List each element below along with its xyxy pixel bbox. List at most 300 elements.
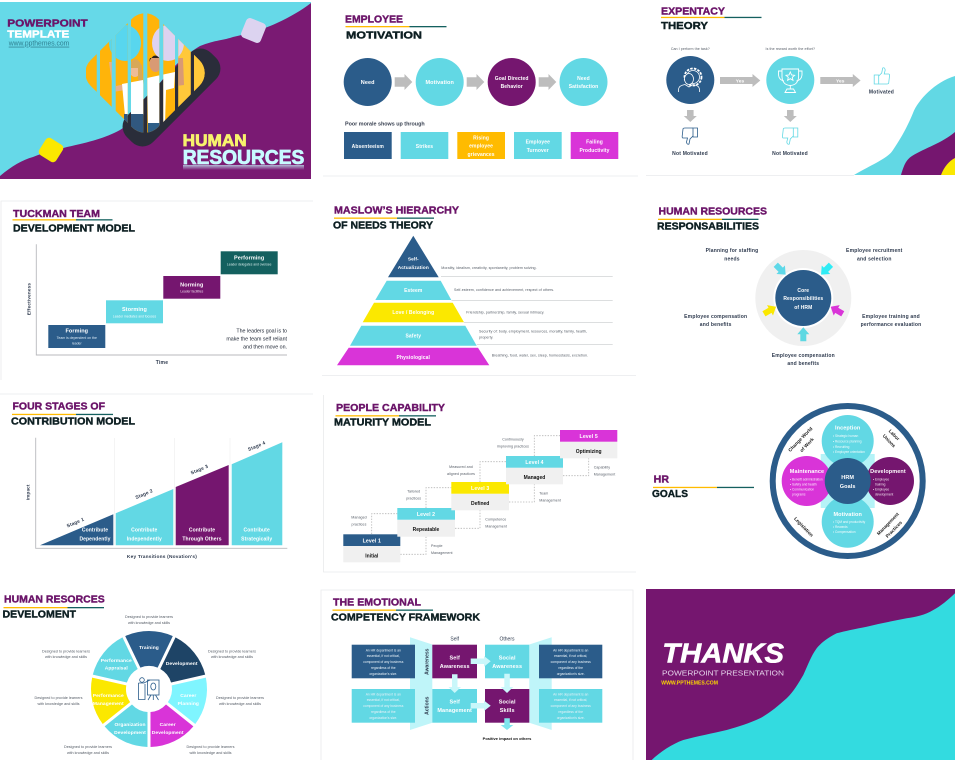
management labels: Team — [539, 492, 548, 496]
row labels: Awareness — [424, 648, 430, 675]
management labels: People — [431, 544, 443, 548]
practice labels: practices — [406, 497, 421, 501]
not motivated labels: Not Motivated — [672, 151, 708, 157]
side description boxes: essential, if not critical, — [367, 654, 400, 658]
heading — [661, 6, 762, 32]
level 3 — [451, 482, 509, 510]
side description boxes: regardless of the — [371, 666, 396, 670]
side description boxes: regardless of the — [371, 710, 396, 714]
stage labels — [66, 440, 267, 529]
stage: norming — [163, 276, 220, 299]
goal: development: Development — [870, 469, 906, 475]
caption: Poor morale shows up through — [345, 122, 425, 128]
stage: forming — [48, 325, 105, 348]
down arrows — [684, 110, 797, 122]
heading: EMPLOYEE — [345, 14, 403, 26]
core circle diagram: Core — [797, 288, 809, 294]
side description boxes: essential, if not critical, — [554, 654, 587, 658]
heading — [657, 205, 767, 232]
matrix boxes: Skills — [500, 708, 515, 714]
management labels: Capability — [594, 466, 610, 470]
heading: THEORY — [661, 20, 708, 32]
icon: trophy in circle — [766, 56, 814, 104]
ring labels: of Work — [799, 437, 816, 454]
stage captions: Independently — [127, 536, 162, 542]
panel: emotional competency framework — [321, 590, 633, 760]
leader goal note: and then move on. — [243, 344, 287, 350]
heading — [652, 474, 754, 500]
side description boxes: regardless of the — [558, 666, 583, 670]
heading: TUCKMAN TEAM — [13, 208, 100, 220]
responsibility labels: and selection — [857, 256, 892, 262]
symptom boxes: Rising — [473, 136, 489, 142]
level 2: Level 2 — [417, 512, 435, 518]
cover heading: TEMPLATE — [7, 28, 69, 40]
wheel descriptions: Designed to provide learners — [187, 745, 235, 749]
yes arrows — [720, 74, 861, 87]
stage captions: Contribute — [82, 528, 108, 534]
management labels — [431, 466, 615, 555]
column labels: Self — [450, 636, 460, 642]
goal: motivation: • Compensation — [833, 530, 856, 534]
side description boxes: organization's size. — [369, 716, 397, 720]
wheel descriptions: with knowledge and skills — [189, 751, 232, 755]
outcome label: Positive impact on others — [483, 736, 532, 741]
side description boxes: essential, if not critical, — [367, 698, 400, 702]
heading: DEVELOPMENT MODEL — [13, 222, 136, 234]
stage captions: Through Others — [182, 536, 222, 542]
goal: maintenance: • Safety and health — [790, 482, 817, 486]
heading: MOTIVATION — [346, 29, 422, 41]
side description boxes: component of any business — [551, 704, 591, 708]
photo: two people with speech bubbles — [86, 13, 205, 133]
leader goal note: The leaders goal is to — [236, 328, 287, 334]
level 4: Level 4 — [525, 460, 544, 466]
stage captions: Dependently — [79, 536, 111, 542]
management labels: Management — [539, 498, 561, 502]
pyramid: Esteem — [404, 288, 423, 294]
level 1: Level 1 — [363, 538, 381, 544]
matrix boxes — [432, 645, 529, 723]
wheel descriptions: Designed to provide learners — [42, 650, 90, 654]
panel: employee motivation — [323, 14, 638, 176]
level 1 — [343, 534, 400, 562]
dotted connectors — [372, 436, 589, 554]
heading: MATURITY MODEL — [334, 417, 432, 429]
center: hrm goals: Goals — [840, 484, 856, 490]
row labels: Actions — [424, 696, 430, 715]
ring labels: Practices — [885, 520, 904, 540]
process flow circles: Motivation — [425, 80, 454, 86]
decoration: lavender rounded square — [240, 17, 267, 44]
pyramid: Safety — [405, 334, 421, 340]
panel: people capability maturity model — [324, 395, 636, 572]
leader goal note — [226, 328, 288, 350]
management labels: Management — [431, 551, 453, 555]
goal: motivation: • TQM and productivity — [833, 520, 866, 524]
stage labels: Stage 3 — [190, 464, 209, 476]
responsibility labels: Employee compensation — [772, 353, 835, 359]
questions: Is the reward worth the effort? — [766, 47, 815, 51]
goal: maintenance: programs — [792, 492, 806, 496]
y axis label: Effectiveness — [26, 283, 32, 315]
practice labels: Measured and — [449, 465, 473, 469]
goal: maintenance: • Communication — [790, 488, 814, 492]
wheel descriptions: Designed to provide learners — [64, 745, 112, 749]
purple wave — [0, 3, 311, 179]
heading: HUMAN RESORCES — [4, 594, 105, 606]
matrix boxes: Awareness — [440, 664, 470, 670]
ring labels — [787, 426, 904, 540]
level 1: Initial — [365, 554, 379, 560]
ring labels: Labor — [887, 428, 901, 442]
practice labels: Managed — [351, 516, 367, 520]
axes — [36, 438, 287, 548]
process flow circles — [344, 58, 608, 106]
process flow circles: Need — [361, 80, 375, 86]
practice labels: aligned practices — [447, 472, 475, 476]
responsibility labels: Employee recruitment — [846, 248, 903, 254]
management labels: Management — [485, 524, 507, 528]
wheel labels: Development — [152, 730, 184, 736]
practice labels: Continuously — [502, 438, 524, 442]
wheel descriptions: Designed to provide learners — [208, 650, 256, 654]
panel: human resources responsibilities — [657, 205, 921, 367]
process flow circles: Need — [577, 76, 590, 82]
heading: FOUR STAGES OF — [12, 401, 106, 413]
center: hrm goals — [825, 458, 871, 504]
flow arrows — [395, 74, 556, 90]
side description boxes: essential, if not critical, — [554, 698, 587, 702]
cyan wave — [652, 593, 955, 760]
side description boxes: organization's size. — [369, 672, 397, 676]
ring labels: Unions — [881, 433, 897, 449]
side description boxes: An HR department is an — [553, 692, 588, 696]
wheel descriptions: Designed to provide learners — [35, 696, 83, 700]
practice labels: practices — [352, 522, 367, 526]
wheel labels: Appraisal — [105, 666, 128, 672]
stage captions: Contribute — [189, 528, 215, 534]
goal: development: • Employee — [873, 478, 889, 482]
inward arrows — [761, 261, 846, 341]
stage captions: Contribute — [244, 528, 270, 534]
goal: development: • Employee — [873, 488, 889, 492]
stage: norming: Norming — [180, 282, 203, 288]
symptom boxes: Productivity — [579, 148, 610, 154]
panel: maslow's hierarchy of needs — [322, 204, 636, 376]
ring labels: Management — [876, 511, 901, 537]
symptom boxes: Employee — [526, 140, 550, 146]
practice labels — [351, 438, 529, 526]
side description boxes: An HR department is an — [366, 648, 401, 652]
heading: HUMAN RESOURCES — [658, 205, 767, 217]
motivated label: Motivated — [869, 90, 894, 96]
wheel descriptions — [35, 615, 264, 755]
process flow circles: Satisfaction — [569, 84, 598, 90]
need descriptions — [441, 266, 588, 358]
side description boxes: component of any business — [363, 660, 404, 664]
stage: performing — [221, 251, 278, 274]
side description boxes: An HR department is an — [366, 692, 401, 696]
need descriptions: property. — [479, 336, 493, 340]
heading: EXPENTACY — [661, 6, 725, 18]
wheel labels: Career — [160, 722, 176, 728]
yes arrows: Yes — [736, 78, 745, 84]
connecting square — [821, 454, 875, 508]
stage shapes — [40, 442, 282, 545]
wheel labels: Training — [139, 645, 159, 651]
goal: development: development — [875, 492, 893, 496]
leader goal note: make the team self reliant — [226, 336, 288, 342]
core circle diagram: Responsibilities — [783, 296, 823, 302]
side description boxes: An HR department is an — [553, 648, 588, 652]
icon: thumbs down, navy — [682, 128, 698, 144]
wheel descriptions: with knowledge and skills — [37, 702, 80, 706]
heading: MASLOW’S HIERARCHY — [334, 204, 459, 216]
pyramid: Love / Belonging — [392, 310, 434, 316]
goal: inception: • Employee orientation — [833, 450, 865, 454]
column labels: Others — [499, 636, 515, 642]
wheel labels: Development — [114, 730, 146, 736]
goal: development: training — [875, 482, 886, 486]
icon: presenter at board — [138, 678, 159, 700]
wheel labels: Career — [180, 693, 196, 699]
icon: thumbs down, cyan — [782, 128, 798, 144]
symptom boxes: Strikes — [416, 144, 433, 150]
ring labels: Legislation — [792, 516, 814, 539]
decoration: yellow rounded square — [37, 136, 65, 164]
goal: motivation: • Rewards — [833, 525, 848, 529]
practice labels: improving practices — [497, 444, 529, 448]
panel: expectancy theory — [646, 6, 955, 176]
process flow circles: Goal Directed — [495, 76, 529, 82]
practice labels: Tailored — [407, 490, 420, 494]
level 4: Managed — [524, 475, 545, 481]
column labels — [450, 636, 515, 642]
cover heading — [7, 18, 88, 48]
website: WWW.PPTHEMES.COM — [661, 680, 719, 686]
symptom boxes: Turnover — [527, 148, 549, 154]
x axis label: Time — [156, 360, 168, 366]
center: hrm goals: HRM — [841, 475, 854, 481]
segmented wheel — [87, 631, 211, 752]
subtitle: POWERPOINT PRESENTATION — [662, 669, 784, 678]
stage captions — [79, 528, 272, 542]
responsibility labels: Planning for staffing — [706, 248, 758, 254]
level 5 — [560, 430, 617, 458]
need descriptions: Friendship, partnership, family, sexual intimacy. — [466, 310, 544, 314]
level 3: Defined — [471, 501, 489, 507]
light bow shapes — [410, 637, 552, 730]
not motivated labels: Not Motivated — [772, 151, 808, 157]
pyramid: Physiological — [397, 355, 431, 361]
wheel descriptions: with knowledge and skills — [45, 655, 87, 659]
need descriptions: Security of: body, employment, resources, morality, family, health, — [479, 330, 587, 334]
dark diamond shadow — [116, 42, 227, 153]
stage labels: Stage 1 — [66, 517, 85, 529]
goal: maintenance: • Benefit administration — [790, 478, 823, 482]
heading: GOALS — [652, 488, 688, 500]
stage: performing: Leader delegates and oversee — [227, 262, 272, 266]
heading: COMPETENCY FRAMEWORK — [331, 611, 480, 623]
wheel labels: Management — [93, 701, 124, 707]
stage: forming: leader — [72, 342, 82, 346]
panel: cover slide — [0, 2, 311, 179]
wheel descriptions: with knowledge and skills — [128, 621, 170, 625]
panel: four stages of contribution model — [0, 394, 313, 560]
wheel descriptions: with knowledge and skills — [219, 702, 261, 706]
pyramid: Actualization — [398, 265, 429, 271]
core circle diagram — [755, 250, 851, 346]
matrix boxes: Awareness — [492, 664, 522, 670]
heading: CONTRIBUTION MODEL — [11, 416, 136, 428]
heading — [11, 401, 136, 428]
symptom boxes: employee — [469, 144, 493, 150]
wheel labels: Planning — [178, 701, 199, 707]
stage: performing: Performing — [234, 256, 264, 262]
stage: forming: Team is dependent on the — [57, 336, 97, 340]
panel: hr goals — [652, 406, 923, 556]
side description boxes: component of any business — [551, 660, 591, 664]
wheel labels: Organization — [114, 722, 146, 728]
row labels — [424, 648, 430, 715]
pyramid — [337, 236, 489, 365]
level 5: Level 5 — [580, 434, 598, 440]
heading: OF NEEDS THEORY — [333, 220, 433, 232]
responsibility labels: performance evaluation — [861, 322, 921, 328]
corner waves — [854, 76, 955, 175]
cover heading: www.ppthemes.com — [8, 39, 69, 48]
responsibility labels: and benefits — [787, 361, 819, 367]
stage labels: Stage 2 — [135, 488, 154, 501]
y axis label: Impact — [26, 484, 30, 500]
need descriptions: Self-esteem, confidence and achievement, respect of others. — [454, 288, 554, 292]
heading: RESPONSABILITIES — [657, 220, 759, 232]
responsibility labels: Employee compensation — [684, 314, 747, 320]
questions — [671, 47, 815, 51]
goal: development — [866, 457, 914, 505]
goal: maintenance — [782, 456, 832, 506]
matrix boxes: Management — [437, 708, 472, 714]
cover title: human resources: HUMAN — [183, 131, 247, 150]
cover heading: POWERPOINT — [7, 18, 88, 30]
level 2 — [397, 508, 455, 537]
panel: tuckman team development model — [1, 201, 313, 380]
responsibility labels: needs — [724, 256, 740, 262]
side description boxes: regardless of the — [558, 710, 583, 714]
yes arrows: Yes — [836, 78, 845, 84]
heading: HR — [654, 474, 669, 486]
framework arrows — [448, 656, 513, 730]
level 3: Level 3 — [471, 486, 489, 492]
ring labels: Change World — [787, 426, 814, 454]
stage captions: Contribute — [131, 528, 158, 534]
wheel labels — [93, 645, 199, 736]
cover title: human resources — [183, 131, 304, 170]
cover title: human resources: RESOURCES — [183, 147, 304, 169]
wheel labels: Performance — [101, 658, 132, 664]
not motivated labels — [672, 151, 808, 157]
wheel descriptions: Designed to provide learners — [216, 696, 264, 700]
stage captions: Strategically — [241, 536, 272, 542]
heading: DEVELOMENT — [2, 609, 77, 621]
level 5: Optimizing — [576, 449, 602, 455]
goal: inception: • Strategic human — [833, 434, 858, 438]
goal: inception: • Resource planning — [833, 440, 862, 444]
stage: norming: Leader facilities — [180, 290, 204, 294]
icon: gear and person in circle — [666, 56, 714, 104]
goal: inception — [822, 415, 874, 467]
stage: storming — [106, 300, 163, 323]
side description boxes: organization's size. — [557, 716, 585, 720]
management labels: Management — [594, 472, 615, 476]
wheel labels: Development — [166, 661, 198, 667]
heading — [331, 596, 480, 623]
side description boxes — [352, 645, 602, 723]
outer ring — [773, 406, 923, 556]
matrix boxes: Self — [449, 656, 460, 662]
stage: storming: Storming — [122, 307, 147, 313]
need descriptions: Breathing, food, water, sex, sleep, homeostasis, excretion. — [492, 354, 588, 358]
management labels: Competence — [485, 518, 506, 522]
symptom boxes — [344, 132, 618, 159]
matrix boxes: Social — [499, 656, 516, 662]
pyramid: Self- — [408, 256, 419, 262]
heading: PEOPLE CAPABILITY — [336, 402, 445, 414]
wheel labels: Performance — [93, 693, 124, 699]
responsibility labels: Employee training and — [862, 314, 920, 320]
stage labels: Stage 4 — [247, 440, 267, 453]
x axis label: Key Transitions (Novation's) — [127, 554, 197, 560]
heading — [333, 204, 459, 232]
questions: Can I perform the task? — [671, 47, 710, 51]
matrix boxes: Social — [499, 700, 516, 706]
responsibility labels — [684, 248, 921, 367]
goal: maintenance: Maintenance — [790, 469, 824, 475]
goal: motivation — [822, 496, 874, 548]
matrix boxes: Self — [449, 700, 460, 706]
icon: thumbs up — [874, 68, 890, 84]
heading: THE EMOTIONAL — [333, 596, 422, 608]
goal: inception: • Recruiting — [833, 445, 850, 449]
symptom boxes: Failing — [586, 140, 603, 146]
wheel descriptions: with knowledge and skills — [211, 655, 253, 659]
axes — [36, 244, 287, 355]
thanks title: THANKS — [662, 638, 784, 669]
stage: forming: Forming — [65, 328, 88, 334]
heading — [12, 208, 136, 234]
level 2: Repeatable — [413, 527, 440, 533]
side description boxes: organization's size. — [557, 672, 585, 676]
heading — [334, 402, 445, 429]
goal: motivation: Motivation — [833, 512, 862, 518]
responsibility labels: and benefits — [700, 322, 732, 328]
panel: human resources development — [2, 594, 264, 755]
stage: storming: Leader mediates and focuses — [113, 314, 156, 318]
core circle diagram: of HRM — [794, 305, 812, 311]
heading — [2, 594, 105, 621]
heading — [345, 14, 446, 41]
side description boxes: component of any business — [363, 704, 404, 708]
process flow circles: Behavior — [501, 84, 523, 90]
wheel descriptions: with knowledge and skills — [67, 751, 109, 755]
goal: inception: Inception — [835, 426, 861, 432]
level 4 — [506, 456, 563, 484]
panel: thanks slide — [646, 589, 955, 760]
symptom boxes: Absenteeism — [352, 144, 384, 150]
symptom boxes: grievances — [468, 152, 495, 158]
wheel descriptions: Designed to provide learners — [125, 615, 173, 619]
